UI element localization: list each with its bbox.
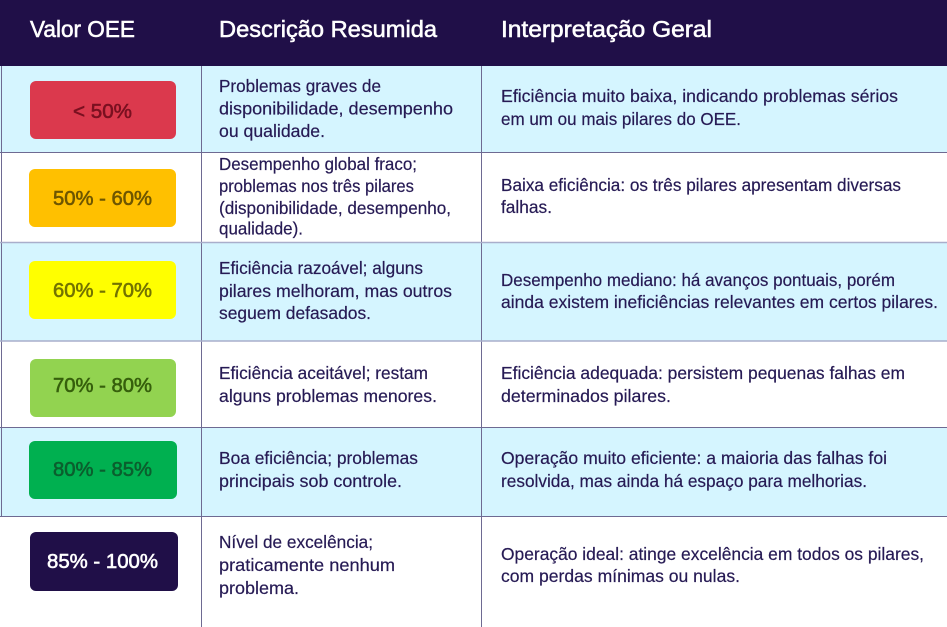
description: 85% to 100%	[219, 532, 395, 598]
interpretation: 60% to 70%	[501, 270, 938, 312]
description: 50% to 60%: qualidade).	[219, 218, 303, 238]
heading: Interpretação Geral: Interpretação Geral	[501, 16, 712, 42]
interpretation: 50% to 60%: falhas.	[501, 197, 552, 217]
interpretation: below 50%: em um ou mais pilares do OEE.	[501, 109, 741, 129]
heading: Valor OEE: Valor OEE	[30, 16, 135, 42]
interpretation: 85% to 100%: com perdas mínimas ou nulas.	[501, 566, 740, 586]
interpretation: below 50%	[501, 86, 898, 129]
header bar	[0, 0, 947, 66]
interpretation: 85% to 100%	[501, 544, 924, 586]
badge: 80% to 85%	[29, 441, 177, 499]
row: 50% to 60%	[29, 154, 901, 238]
description: 50% to 60%: (disponibilidade, desempenho,	[219, 198, 451, 218]
heading: Descrição Resumida: Descrição Resumida	[219, 16, 437, 42]
description: 80% to 85%: principais sob controle.	[219, 471, 402, 491]
description: 70% to 80%: Eficiência aceitável; restam	[219, 363, 428, 383]
badge: 85% to 100%: 85% - 100%	[47, 551, 158, 573]
description: 50% to 60%: Desempenho global fraco;	[219, 154, 417, 174]
interpretation: 80% to 85%: resolvida, mas ainda há espaço para melhorias.	[501, 471, 867, 491]
badge: 50% to 60%: 50% - 60%	[53, 188, 152, 210]
row: 80% to 85%	[29, 441, 887, 499]
row: below 50%	[30, 76, 898, 141]
badge: 70% to 80%: 70% - 80%	[53, 375, 152, 397]
interpretation: below 50%: Eficiência muito baixa, indicando problemas sérios	[501, 86, 898, 106]
interpretation: 70% to 80%: Eficiência adequada: persistem pequenas falhas em	[501, 363, 905, 383]
description: 60% to 70%: seguem defasados.	[219, 303, 371, 323]
description: 85% to 100%: praticamente nenhum	[219, 555, 395, 575]
interpretation: 85% to 100%: Operação ideal: atinge excelência em todos os pilares,	[501, 544, 924, 564]
interpretation: 80% to 85%: Operação muito eficiente: a maioria das falhas foi	[501, 448, 887, 468]
description: 80% to 85%	[219, 448, 418, 491]
interpretation: 60% to 70%: Desempenho mediano: há avanços pontuais, porém	[501, 270, 895, 290]
row: 70% to 80%	[30, 359, 905, 417]
badge: below 50%	[30, 81, 176, 139]
interpretation: 50% to 60%: Baixa eficiência: os três pilares apresentam diversas	[501, 175, 901, 195]
badge: 85% to 100%	[30, 532, 178, 591]
interpretation: 60% to 70%: ainda existem ineficiências relevantes em certos pilares.	[501, 292, 938, 312]
interpretation: 70% to 80%	[501, 363, 905, 406]
badge: 60% to 70%	[29, 261, 176, 319]
description: 85% to 100%: problema.	[219, 578, 299, 598]
description: 70% to 80%	[219, 363, 437, 406]
interpretation: 70% to 80%: determinados pilares.	[501, 386, 671, 406]
interpretation: 50% to 60%	[501, 175, 901, 217]
badge: 50% to 60%	[29, 169, 176, 227]
description: 60% to 70%	[219, 258, 452, 323]
description: below 50%: Problemas graves de	[219, 76, 381, 96]
badge: 70% to 80%	[30, 359, 176, 417]
description: 50% to 60%	[219, 154, 451, 238]
description: 60% to 70%: Eficiência razoável; alguns	[219, 258, 423, 278]
interpretation: 80% to 85%	[501, 448, 887, 491]
description: below 50%: ou qualidade.	[219, 121, 325, 141]
description: below 50%	[219, 76, 453, 141]
description: below 50%: disponibilidade, desempenho	[219, 98, 453, 118]
badge: below 50%: < 50%	[73, 101, 132, 123]
row: 60% to 70%	[29, 258, 938, 323]
description: 50% to 60%: problemas nos três pilares	[219, 176, 414, 196]
description: 85% to 100%: Nível de excelência;	[219, 532, 373, 552]
description: 70% to 80%: alguns problemas menores.	[219, 386, 437, 406]
description: 60% to 70%: pilares melhoram, mas outros	[219, 281, 452, 301]
row: 85% to 100%	[30, 532, 924, 598]
badge: 80% to 85%: 80% - 85%	[53, 459, 152, 481]
description: 80% to 85%: Boa eficiência; problemas	[219, 448, 418, 468]
badge: 60% to 70%: 60% - 70%	[53, 280, 152, 302]
